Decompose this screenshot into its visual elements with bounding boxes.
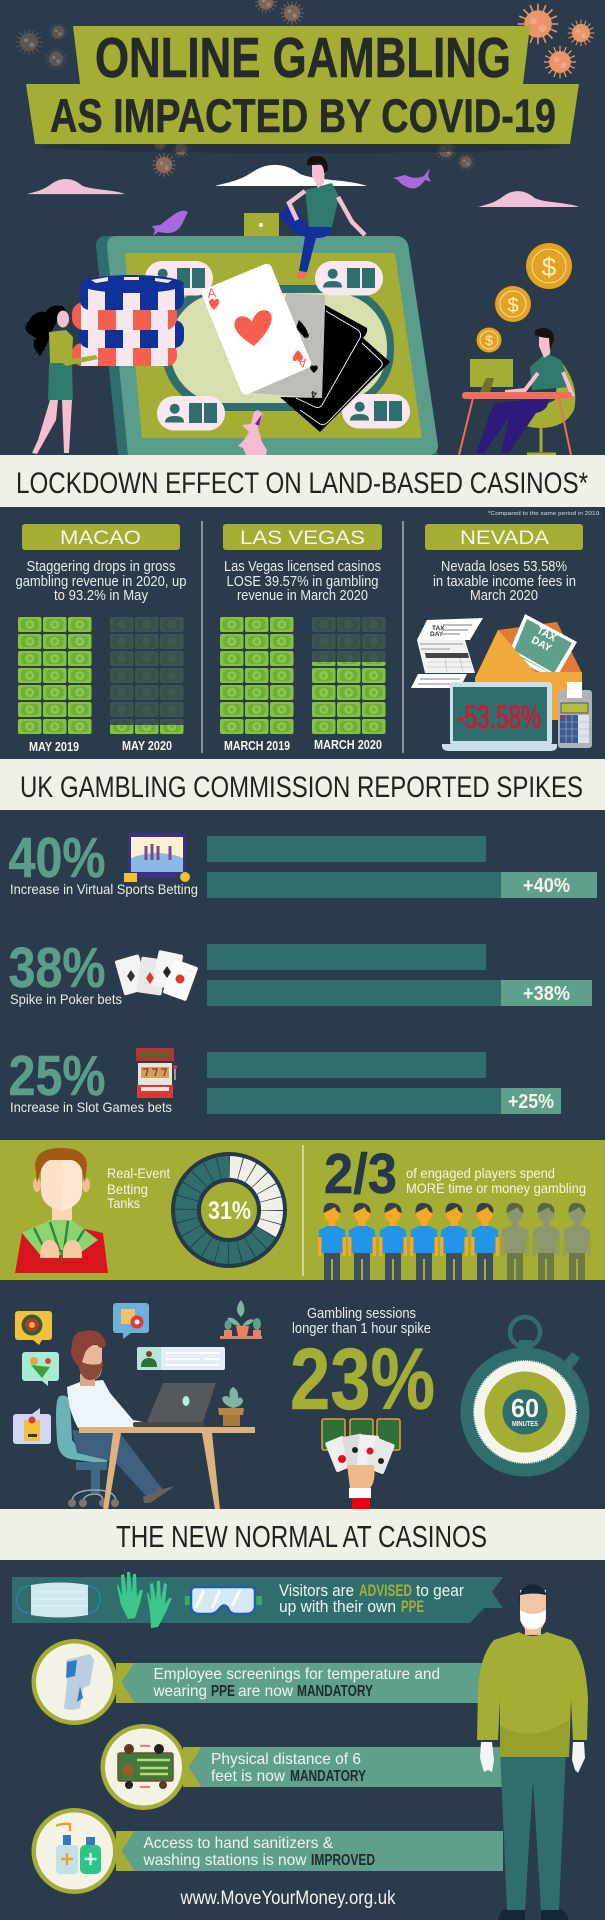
- potted plant: [218, 1387, 244, 1426]
- illustration: calculator: [558, 682, 592, 748]
- seat pills: [145, 261, 410, 430]
- icon: gloves: [117, 1572, 172, 1628]
- text: Employee screenings for temperature and: [154, 1666, 440, 1683]
- stat: 25%: [8, 1044, 106, 1108]
- heading: MACAO: [60, 527, 141, 549]
- stat row: poker bets: [8, 936, 592, 1007]
- description: [224, 559, 381, 604]
- head: [519, 1584, 547, 1635]
- chart labels: MARCH 2019: [224, 738, 290, 753]
- text: engaged players: of engaged players spend: [406, 1165, 555, 1181]
- stat row: slot games: [8, 1044, 561, 1115]
- text: [279, 1582, 464, 1616]
- illustration: envelope and tax letter: TAX: [535, 624, 558, 644]
- bar: increase: +40%: [523, 875, 570, 897]
- playing cards: A: [206, 285, 217, 301]
- text: real-event betting: Tanks: [107, 1195, 140, 1211]
- bar: baseline: [207, 944, 486, 970]
- text: Visitors are: [279, 1582, 354, 1600]
- icon: stopwatch 60 minutes: MINUTES: [512, 1419, 538, 1428]
- decorative virus particles: [16, 0, 594, 177]
- man: legs: [72, 1430, 163, 1497]
- illustration: tax forms: DAY: [430, 631, 444, 638]
- man: head: [71, 1330, 106, 1386]
- text: MANDATORY: [297, 1683, 373, 1700]
- chart labels: [29, 738, 172, 754]
- description: revenue in March 2020: [237, 588, 368, 604]
- icon: slot machine: [136, 1048, 177, 1098]
- description: Staggering drops in gross: [26, 559, 176, 575]
- heading: NEVADA: [460, 527, 549, 549]
- playing cards: [202, 264, 390, 432]
- stat: 23%: 23%: [290, 1331, 435, 1428]
- text: [143, 1835, 375, 1869]
- text: feet is now: [211, 1768, 285, 1785]
- icon: hand holding cards: [322, 1419, 400, 1509]
- coin large: $: [542, 252, 557, 282]
- bar: baseline: [207, 1052, 486, 1078]
- banner: lower ribbon: [26, 84, 579, 144]
- icon: roulette table in circle: [100, 1724, 186, 1810]
- bar: increase: +25%: [508, 1091, 554, 1113]
- description: LOSE 39.57% in gambling: [226, 574, 379, 590]
- illustration: tax forms: TAX: [432, 625, 445, 632]
- heading: LAS VEGAS: [240, 527, 365, 549]
- title banner: [26, 26, 579, 153]
- description: [433, 559, 576, 604]
- chair: [56, 1396, 119, 1507]
- money chart: March 2020: [312, 617, 386, 734]
- banner: lower shadow: [42, 141, 562, 153]
- chart labels: MAY 2020: [122, 738, 172, 753]
- panel: Las Vegas: [220, 524, 386, 753]
- bar: increase: [207, 872, 597, 898]
- section header: UK Gambling Commission: [0, 759, 605, 810]
- footnote: *Compared to the same period in 2019.: [488, 511, 602, 517]
- chart labels: MAY 2019: [29, 739, 79, 754]
- money chart: March 2019: [220, 617, 294, 734]
- stat: -53.58%: -53.58%: [457, 699, 541, 735]
- text: PPE: [211, 1683, 235, 1700]
- chart labels: [224, 737, 382, 753]
- description: [16, 559, 187, 604]
- icon: stopwatch 60 minutes: 60: [511, 1393, 539, 1423]
- money chart: May 2020: [110, 617, 184, 734]
- column dividers: [202, 521, 403, 753]
- description: in taxable income fees in: [433, 574, 576, 590]
- coin small: $: [485, 332, 493, 348]
- label: Spike in Poker bets: [10, 991, 122, 1007]
- label: Increase in Slot Games bets: [10, 1099, 172, 1115]
- panel: Nevada: [411, 524, 592, 751]
- wall plant shelf: [220, 1300, 262, 1339]
- text: up with their own: [279, 1598, 396, 1616]
- section header: lockdown effect: [0, 455, 605, 507]
- heading: [223, 524, 382, 550]
- money chart: May 2019: [18, 617, 92, 734]
- text: gambling sessions: Gambling sessions: [307, 1306, 416, 1322]
- man: shoe: [143, 1486, 175, 1503]
- stat row: virtual sports betting: [8, 826, 597, 898]
- bar: increase: [207, 1088, 561, 1114]
- text: gambling sessions: [292, 1306, 431, 1337]
- description: gambling revenue in 2020, up: [16, 574, 187, 590]
- ribbon: employee screenings: [32, 1639, 488, 1725]
- chart labels: MARCH 2020: [314, 737, 382, 752]
- bar: increase: +38%: [523, 983, 570, 1005]
- stat: 40%: [8, 826, 106, 890]
- text: real-event betting: Betting: [107, 1181, 148, 1197]
- desk: [79, 1427, 255, 1510]
- text: real-event betting: Real-Event: [107, 1165, 170, 1181]
- man at desk: [459, 328, 575, 455]
- hero illustration: casino tablet scene: [25, 156, 579, 455]
- stat: 2/3: 2/3: [324, 1142, 397, 1206]
- illustration: laptop: [442, 682, 557, 751]
- divider: [302, 1145, 304, 1276]
- laptop: [133, 1383, 216, 1427]
- text: gambling sessions: longer than 1 hour spike: [292, 1321, 431, 1337]
- text: are now: [238, 1683, 293, 1700]
- icon: laptop with sports: [123, 833, 191, 882]
- text: engaged players: [406, 1165, 586, 1196]
- text: Access to hand sanitizers &: [144, 1835, 333, 1852]
- heading: [22, 524, 180, 550]
- poker chips stack: [72, 275, 184, 366]
- donut chart: 31%: 31%: [208, 1197, 251, 1225]
- ribbon body: [116, 1663, 135, 1703]
- text: real-event betting: [107, 1165, 170, 1211]
- icon: goggles: [185, 1587, 262, 1614]
- bunny: [238, 410, 267, 455]
- woman carrying chips: [25, 306, 98, 454]
- text: Physical distance of 6: [211, 1751, 361, 1768]
- text: [153, 1666, 440, 1700]
- coin medium: $: [507, 295, 519, 317]
- section header: new normal: [0, 1509, 605, 1560]
- text: MANDATORY: [290, 1768, 366, 1785]
- gloves: [480, 1742, 585, 1773]
- sweater: [477, 1632, 588, 1757]
- illustration: tax forms: [411, 618, 483, 688]
- text: IMPROVED: [311, 1852, 375, 1869]
- man: torso: [67, 1380, 143, 1428]
- heading: [425, 524, 583, 550]
- description: March 2020: [470, 588, 538, 604]
- birds: [152, 168, 431, 236]
- icon: stopwatch 60 minutes: [460, 1317, 590, 1476]
- banner: upper ribbon: [73, 26, 530, 84]
- footer url: www.MoveYourMoney.org.uk: [180, 1888, 396, 1909]
- text: PPE: [401, 1598, 424, 1616]
- text: engaged players: MORE time or money gambling: [406, 1180, 586, 1196]
- tablet body: [96, 236, 438, 455]
- text: [211, 1751, 366, 1785]
- ribbon: hand sanitizers: [32, 1808, 503, 1894]
- icon: sanitizer in circle: [32, 1808, 118, 1894]
- person in PPE: [477, 1584, 588, 1920]
- shoes: [498, 1908, 569, 1920]
- text: ADVISED: [359, 1582, 412, 1600]
- illustration: envelope and tax letter: DAY: [529, 634, 554, 655]
- donut chart: 31%: [171, 1152, 287, 1268]
- bar: baseline: [207, 836, 486, 862]
- clouds: [27, 165, 579, 207]
- ribbon body: [183, 1747, 202, 1787]
- icon: playing cards: [115, 950, 198, 1001]
- illustration: man gambling at desk: [13, 1300, 262, 1510]
- sitting man with laptop: [244, 156, 365, 279]
- ribbon: visitors advised PPE: [12, 1572, 503, 1628]
- coins: [476, 243, 572, 352]
- trousers: [500, 1750, 566, 1910]
- text: wearing: [153, 1683, 207, 1700]
- bar: increase: [207, 980, 592, 1006]
- icon: man with money: [15, 1148, 108, 1273]
- playing cards: A: [297, 355, 308, 371]
- section header: new normal: THE NEW NORMAL AT CASINOS: [116, 1519, 487, 1554]
- label: Increase in Virtual Sports Betting: [10, 881, 198, 897]
- stat: 38%: [8, 936, 106, 1000]
- text: to gear: [416, 1582, 464, 1600]
- description: Nevada loses 53.58%: [441, 559, 567, 575]
- chat bubbles: [13, 1303, 225, 1444]
- playing cards: 4: [311, 388, 317, 399]
- ribbon: physical distance: [100, 1724, 503, 1810]
- icon: thermometer in circle: [32, 1639, 118, 1725]
- description: to 93.2% in May: [54, 588, 149, 604]
- panel: Macao: [16, 524, 187, 754]
- description: Las Vegas licensed casinos: [224, 559, 381, 575]
- illustration: envelope and tax letter: [475, 614, 582, 720]
- text: washing stations is now: [143, 1852, 307, 1869]
- panel: olive stats band: [0, 1140, 605, 1280]
- icon: face mask: [17, 1582, 100, 1618]
- pictogram: people 6 of 9: [318, 1203, 591, 1280]
- ribbon body: [116, 1831, 135, 1871]
